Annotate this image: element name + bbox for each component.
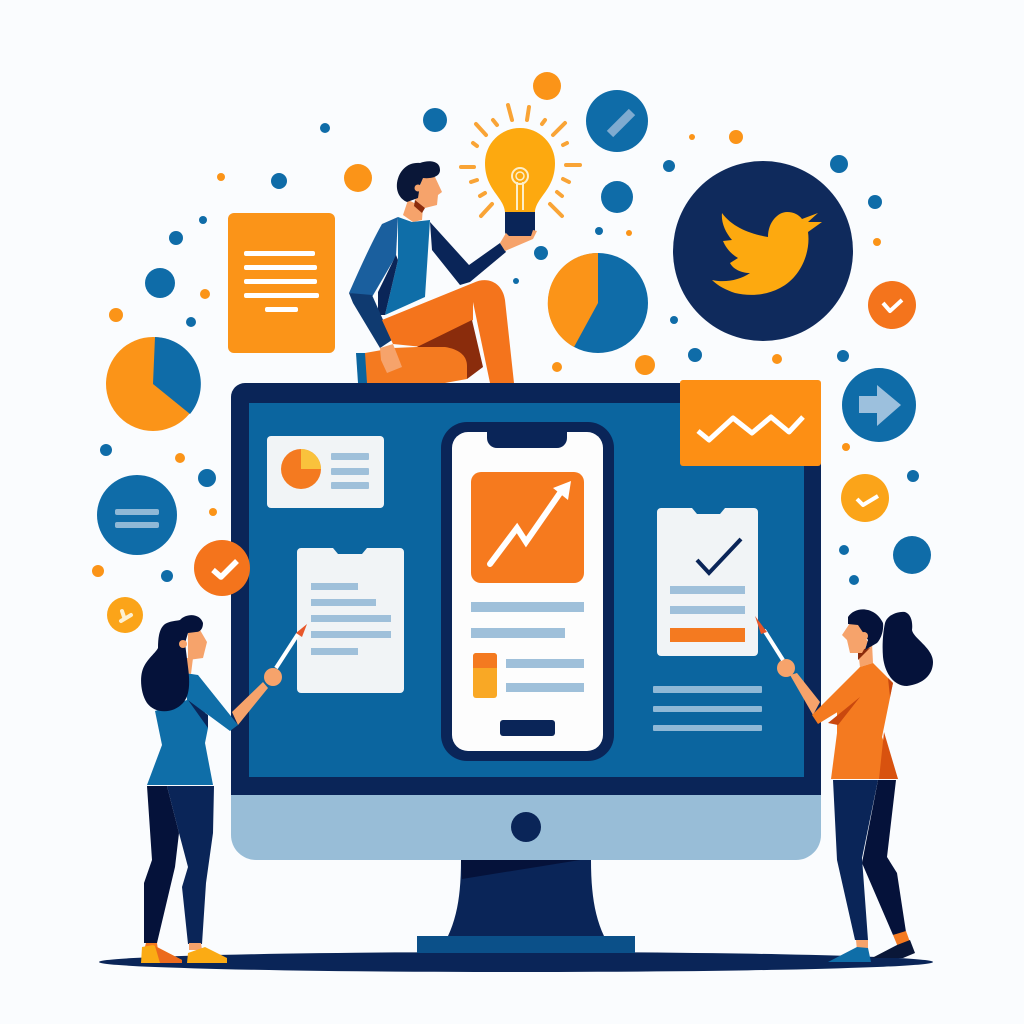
growth chart tile xyxy=(471,472,584,583)
shoes xyxy=(141,943,227,963)
chart card xyxy=(680,380,821,466)
screen text lines xyxy=(653,686,762,731)
person seated on monitor xyxy=(349,161,537,383)
monitor xyxy=(231,383,821,953)
ponytail xyxy=(883,612,933,686)
pointer xyxy=(276,624,307,668)
icon: check badge orange right xyxy=(868,281,916,329)
power button xyxy=(511,812,541,842)
face xyxy=(415,177,442,208)
arm xyxy=(232,682,268,725)
back sleeve xyxy=(349,217,398,297)
monitor screen xyxy=(249,403,804,777)
check card xyxy=(657,508,758,656)
pointer xyxy=(755,616,783,660)
sleeve xyxy=(188,675,238,731)
shoes xyxy=(828,931,915,962)
torso xyxy=(385,217,430,315)
monitor stand xyxy=(417,860,635,953)
legs xyxy=(144,786,179,943)
icon: social bird badge xyxy=(673,161,853,341)
hair xyxy=(848,609,883,650)
raised arm xyxy=(430,222,506,285)
hair xyxy=(397,161,440,202)
thigh and shin xyxy=(382,280,514,383)
floating dots xyxy=(92,72,931,585)
left text card xyxy=(297,548,404,693)
shirt xyxy=(831,663,898,779)
hand xyxy=(264,668,282,686)
resting hand xyxy=(380,344,402,373)
pie chart right xyxy=(548,253,648,353)
phone xyxy=(441,422,614,761)
pie chart left xyxy=(106,337,201,431)
cuff xyxy=(356,353,367,383)
woman left xyxy=(141,615,307,963)
legs xyxy=(862,780,906,935)
sleeve xyxy=(812,667,862,724)
monitor chin xyxy=(231,790,821,860)
neck xyxy=(403,200,423,222)
bulb rays xyxy=(461,105,580,216)
torso xyxy=(147,673,213,785)
neck and face xyxy=(184,658,193,674)
document panel xyxy=(228,213,335,353)
pie summary card xyxy=(267,436,384,508)
icon: menu badge xyxy=(97,475,177,555)
monitor frame xyxy=(231,383,821,795)
leg shadow xyxy=(417,320,483,379)
neck and face xyxy=(858,643,873,667)
woman right xyxy=(755,609,933,962)
lower leg xyxy=(365,347,467,383)
lightbulb xyxy=(461,105,580,216)
icon: check badge orange left xyxy=(194,540,250,596)
icon: check badge yellow right xyxy=(841,474,889,522)
bulb base xyxy=(505,212,535,236)
icon: check badge yellow left xyxy=(107,597,143,633)
hand holding bulb xyxy=(500,230,537,251)
floor shadow xyxy=(99,952,933,972)
hair xyxy=(141,615,203,711)
icon: pencil badge xyxy=(586,90,648,152)
forearm xyxy=(349,293,392,348)
arm xyxy=(790,673,820,715)
hand xyxy=(777,659,795,677)
icon: arrow badge xyxy=(842,368,916,442)
